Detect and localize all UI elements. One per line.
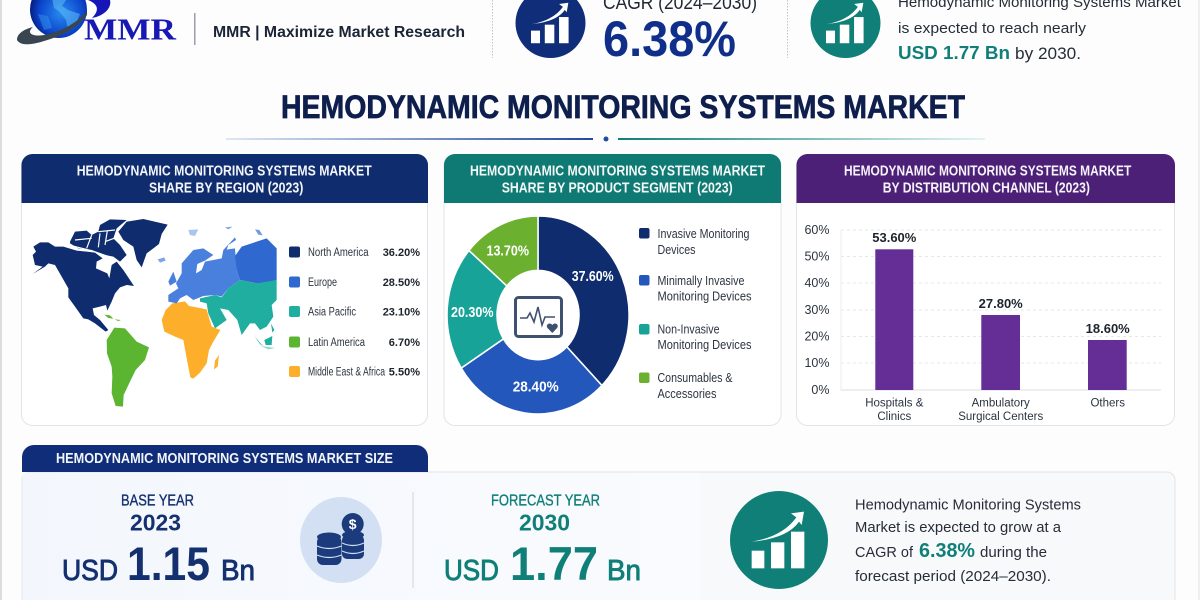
base year stat: 2023 [130,510,181,536]
donut labels [451,244,614,396]
donut chart [447,216,629,414]
bar: Ambulatory Surgical Centers 27.80%: 27.80% [979,296,1023,311]
panel header: region [22,154,428,203]
market forecast statement: is expected to reach nearly [898,20,1087,37]
map: Africa [162,301,220,379]
tab header: market size [22,445,428,472]
legend: product segments [639,227,752,401]
donut labels: 28.40% [513,380,559,396]
legend item: North America: 36.20% [383,247,420,259]
y axis labels: 40% [804,276,830,290]
CAGR statement: forecast period (2024–2030). [855,568,1051,585]
panel: market size [22,445,1175,600]
legend item: invasive monitoring devices [639,227,750,257]
y axis labels: 20% [804,330,830,344]
bar: Others 18.60%: Others [1090,398,1125,410]
bar: Ambulatory Surgical Centers 27.80%: Surgical Centers [958,411,1043,423]
y axis labels: 60% [804,223,830,237]
base year stat [62,492,255,590]
panel header: product segment [444,154,781,203]
CAGR statement [855,496,1081,585]
logo: MMR globe [17,0,177,46]
CAGR statement: Market is expected to grow at a [855,519,1062,536]
CAGR stat: 6.38% [603,11,736,67]
CAGR statement: CAGR of [855,544,914,561]
donut labels: 20.30% [451,305,494,321]
panel: distribution channel [796,154,1175,426]
legend item: consumables and accessories: Consumables & [658,371,733,385]
bar: Ambulatory Surgical Centers 27.80% [958,296,1043,423]
legend item: Asia Pacific [289,306,420,319]
icon: teal growth chart [811,0,880,58]
forecast year stat: Bn [607,555,641,587]
icon: coin stacks: $ [349,516,357,532]
divider: base and forecast [412,492,414,588]
legend item: Europe [289,276,420,289]
market forecast statement [898,0,1182,63]
base year stat: USD [62,555,118,587]
panel header: region: HEMODYNAMIC MONITORING SYSTEMS MARKET [77,164,372,180]
map: South America [104,315,149,407]
legend item: minimally invasive monitoring devices: Monitoring Devices [658,290,752,304]
bar: Ambulatory Surgical Centers 27.80%: Ambulatory [972,398,1030,410]
divider: header right [786,0,788,58]
logo: MMR globe: MMR [84,12,177,46]
y axis labels: 0% [811,383,830,397]
legend item: Latin America: Latin America [308,337,365,349]
map: Russia [235,229,277,283]
bar: Hospitals & Clinics 53.60% [865,230,924,423]
panel header: distribution channel [796,154,1175,203]
forecast year stat: FORECAST YEAR [491,492,600,510]
map: Asia Pacific [200,280,277,349]
slice: invasive 37.60% [538,216,629,386]
legend item: Asia Pacific: 23.10% [383,307,420,319]
forecast year stat: 2030 [519,510,570,536]
panel header: distribution channel: BY DISTRIBUTION CHANNEL (2023) [883,181,1090,197]
title: HEMODYNAMIC MONITORING SYSTEMS MARKET [281,89,965,125]
legend item: North America [289,246,420,259]
CAGR statement: 6.38% [919,540,975,562]
legend item: invasive monitoring devices: Invasive Monitoring [658,227,750,241]
divider: header left [492,0,494,58]
world map [33,219,277,407]
title underline [226,136,985,142]
logo divider and company name: MMR | Maximize Market Research [213,24,465,41]
bar: Others 18.60%: 18.60% [1086,321,1130,336]
base year stat: BASE YEAR [121,492,194,510]
slice: consumables 13.70% [469,216,538,286]
legend item: consumables and accessories: Accessories [658,387,716,401]
panel header: product segment: SHARE BY PRODUCT SEGMENT (2023) [502,181,733,197]
donut labels: 13.70% [486,244,529,260]
legend item: Latin America [289,336,420,349]
legend item: minimally invasive monitoring devices: Minimally Invasive [658,274,745,288]
legend: regions [289,246,420,379]
bar chart [804,223,1161,423]
legend item: Middle East & Africa: Middle East & Africa [308,367,385,379]
legend item: minimally invasive monitoring devices [639,274,752,304]
icon: teal growth chart large [730,491,828,589]
legend item: Latin America: 6.70% [389,337,420,349]
slice: non-invasive 20.30% [447,250,507,368]
CAGR statement: during the [980,544,1047,561]
map: Greenland [118,219,168,267]
map: North America [33,219,168,332]
market forecast statement: by 2030. [1015,44,1081,63]
icon: navy growth chart [516,0,585,58]
legend item: non-invasive monitoring devices: Non-Invasive [658,322,720,336]
bar: Hospitals & Clinics 53.60%: 53.60% [872,230,917,245]
legend item: Europe: 28.50% [383,277,420,289]
legend item: consumables and accessories [639,371,733,401]
panel header: product segment: HEMODYNAMIC MONITORING SYSTEMS MARKET [470,164,765,180]
forecast year stat: 1.77 [510,537,598,590]
tab header: market size: HEMODYNAMIC MONITORING SYSTEMS MARKET SIZE [56,451,393,467]
legend item: Europe: Europe [308,277,337,289]
legend item: invasive monitoring devices: Devices [658,243,696,257]
legend item: Middle East & Africa: 5.50% [389,367,420,379]
legend item: non-invasive monitoring devices [639,322,752,352]
CAGR statement: Hemodynamic Monitoring Systems [855,496,1081,514]
y axis labels [804,223,830,397]
forecast year stat [444,492,641,590]
icon: coin stacks [300,497,382,583]
donut labels: 37.60% [572,269,614,285]
panel: share by product segment [444,154,781,426]
panel header: region: SHARE BY REGION (2023) [149,181,303,197]
map: Europe [158,227,240,303]
panel: share by region [22,154,428,426]
legend item: non-invasive monitoring devices: Monitoring Devices [658,338,752,352]
y axis labels: 30% [804,303,830,317]
market forecast statement: USD 1.77 Bn [898,43,1010,63]
bar: Hospitals & Clinics 53.60%: Clinics [877,411,911,423]
base year stat: 1.15 [127,537,210,590]
legend item: Asia Pacific: Asia Pacific [308,307,356,319]
legend item: North America: North America [308,247,369,259]
icon: heart monitor [516,298,562,336]
y axis labels: 10% [804,356,830,370]
panel header: distribution channel: HEMODYNAMIC MONITORING SYSTEMS MARKET [844,164,1131,180]
slice: minimally invasive 28.40% [461,339,602,414]
bar: Hospitals & Clinics 53.60%: Hospitals & [865,398,924,410]
bar: Others 18.60% [1086,321,1130,410]
base year stat: Bn [221,555,255,587]
y axis labels: 50% [804,250,830,264]
forecast year stat: USD [444,555,499,587]
